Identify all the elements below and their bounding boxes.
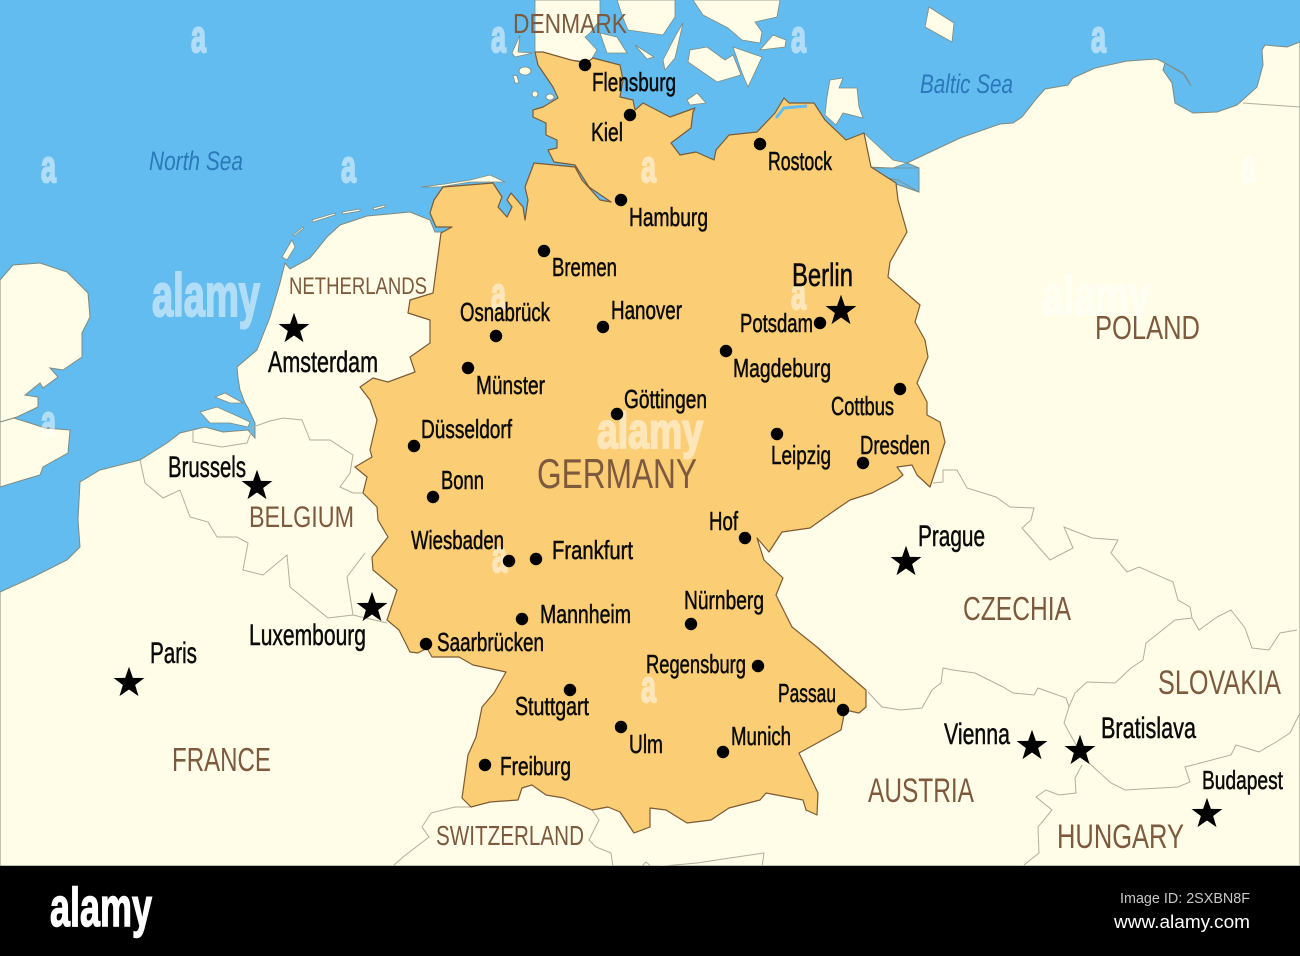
city: Göttingen — [611, 384, 707, 420]
city: Dresden: Dresden — [860, 430, 930, 460]
city: Hamburg — [615, 194, 708, 232]
capital: Amsterdam — [268, 313, 378, 379]
capital: Prague — [891, 520, 985, 575]
city: Cottbus — [831, 383, 906, 421]
capital: Vienna: Vienna — [944, 718, 1010, 751]
watermark: alamy: alamy — [597, 403, 703, 459]
city: Mannheim — [516, 599, 631, 629]
city: Wiesbaden — [411, 525, 515, 567]
capital: Luxembourg — [249, 592, 387, 652]
city: Regensburg: Regensburg — [646, 649, 746, 679]
watermark: alamy: a — [492, 531, 508, 582]
country label: Denmark: DENMARK — [513, 8, 627, 39]
city: Leipzig: Leipzig — [771, 440, 831, 470]
capital: Bratislava: Bratislava — [1101, 712, 1196, 745]
country label: Poland: POLAND — [1095, 309, 1200, 346]
Hel peninsula — [1165, 63, 1191, 86]
city: Osnabrück — [460, 297, 551, 342]
footer bar — [0, 866, 1300, 956]
capital: Budapest — [1192, 765, 1284, 827]
watermark: alamy: a — [791, 11, 807, 62]
city: Bonn: Bonn — [441, 465, 484, 495]
watermark: alamy: alamy — [152, 262, 260, 329]
city: Passau — [778, 678, 849, 716]
watermark: alamy: a — [791, 268, 807, 319]
city: Saarbrücken — [420, 627, 544, 657]
city: Saarbrücken: Saarbrücken — [437, 627, 544, 657]
city: Hof: Hof — [709, 506, 739, 536]
country label: Czechia: CZECHIA — [963, 590, 1071, 627]
Stettin lagoon — [871, 168, 919, 192]
city: Potsdam: Potsdam — [740, 308, 813, 338]
Kaliningrad border — [1243, 103, 1300, 107]
city: Dresden — [857, 430, 930, 469]
city: Hanover: Hanover — [611, 295, 682, 325]
sea label: Baltic Sea: Baltic Sea — [920, 69, 1013, 99]
country label: Belgium: BELGIUM — [249, 501, 354, 534]
country label: France: FRANCE — [172, 741, 271, 778]
city: Münster — [462, 362, 545, 400]
watermark: alamy: a — [41, 396, 57, 447]
city: Bonn — [427, 465, 484, 503]
watermark: alamy: a — [641, 141, 657, 192]
city: Wiesbaden: Wiesbaden — [411, 525, 504, 555]
city: Göttingen: Göttingen — [624, 384, 707, 414]
country label: Austria: AUSTRIA — [868, 772, 974, 810]
watermark: alamy: a — [1241, 141, 1257, 192]
image ID: Image ID: 2SXBN8F — [1120, 890, 1250, 907]
capital: Prague: Prague — [918, 520, 985, 553]
country label: Hungary: HUNGARY — [1057, 818, 1184, 856]
city: Cottbus: Cottbus — [831, 391, 894, 421]
city: Nürnberg — [684, 585, 764, 630]
city: Stuttgart — [515, 684, 590, 721]
city: Hanover — [597, 295, 682, 333]
city: Mannheim: Mannheim — [540, 599, 631, 629]
watermark: alamy: a — [491, 268, 507, 319]
country label: Netherlands: NETHERLANDS — [289, 273, 427, 300]
city: Munich: Munich — [731, 721, 791, 751]
capital: Brussels — [168, 451, 272, 499]
city: Bremen — [538, 245, 617, 282]
watermark: alamy: a — [41, 141, 57, 192]
capital: Luxembourg: Luxembourg — [249, 619, 366, 652]
capital: Berlin: Berlin — [792, 257, 853, 293]
Darss lagoon — [776, 106, 807, 118]
Danish and coastal islands — [200, 0, 954, 427]
city: Magdeburg: Magdeburg — [733, 353, 831, 383]
capital: Amsterdam: Amsterdam — [268, 346, 378, 379]
city: Freiburg: Freiburg — [500, 751, 571, 781]
watermark: alamy: alamy — [1042, 266, 1150, 326]
city: Flensburg: Flensburg — [592, 67, 676, 97]
city: Ulm: Ulm — [629, 729, 663, 759]
Great Britain — [0, 263, 90, 487]
city: Frankfurt — [530, 535, 634, 565]
capital: Brussels: Brussels — [168, 451, 246, 484]
capital: Bratislava — [1065, 712, 1196, 764]
city: Kiel: Kiel — [591, 117, 623, 147]
city: Osnabrück: Osnabrück — [460, 297, 551, 327]
watermark: alamy — [41, 11, 1257, 712]
city: Flensburg — [579, 59, 676, 97]
city: Münster: Münster — [476, 370, 545, 400]
watermark: alamy: a — [1091, 11, 1107, 62]
watermark: alamy: a — [641, 661, 657, 712]
watermark: alamy: a — [191, 11, 207, 62]
neighbouring country borders — [140, 418, 1299, 867]
watermark: alamy: a — [491, 11, 507, 62]
city: Passau: Passau — [778, 678, 836, 708]
city: Leipzig — [771, 428, 831, 470]
watermark: alamy: a — [341, 141, 357, 192]
city: Nürnberg: Nürnberg — [684, 585, 764, 615]
city: Magdeburg — [720, 345, 831, 383]
country label: Germany: GERMANY — [537, 450, 697, 497]
city: Düsseldorf — [408, 414, 513, 452]
city: Stuttgart: Stuttgart — [515, 691, 590, 721]
city: Rostock — [754, 138, 833, 176]
website: www.alamy.com — [1113, 912, 1250, 932]
city: Freiburg — [479, 751, 571, 781]
city: Düsseldorf: Düsseldorf — [421, 414, 513, 444]
country label: Switzerland: SWITZERLAND — [436, 820, 584, 851]
sea label: North Sea: North Sea — [149, 146, 243, 176]
capital: Paris — [114, 637, 197, 696]
city: Bremen: Bremen — [552, 252, 617, 282]
city: Hamburg: Hamburg — [629, 202, 708, 232]
Germany territory — [355, 52, 945, 833]
alamy logo: alamy — [50, 876, 152, 938]
city: Munich — [717, 721, 791, 758]
capital: Berlin — [792, 257, 856, 324]
city: Rostock: Rostock — [768, 146, 833, 176]
capital: Paris: Paris — [150, 637, 197, 670]
city: Ulm — [615, 721, 663, 759]
city: Frankfurt: Frankfurt — [552, 535, 634, 565]
